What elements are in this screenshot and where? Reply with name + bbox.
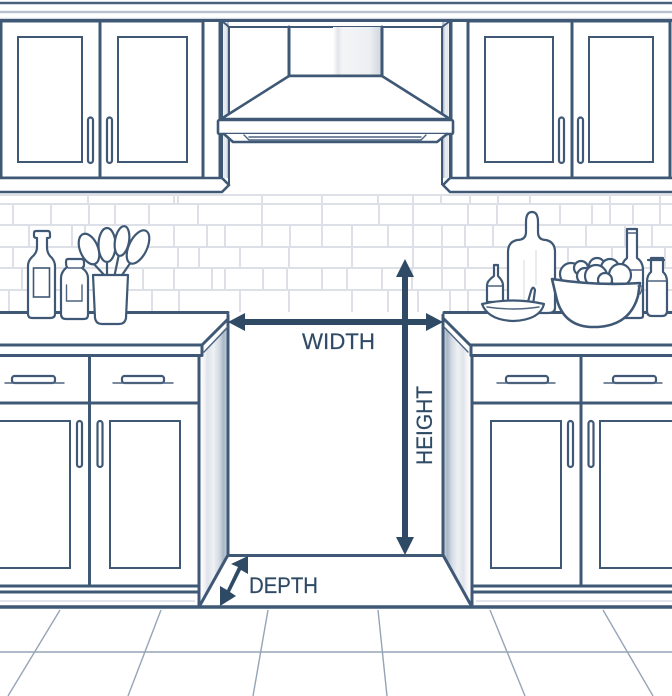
width label: WIDTH bbox=[302, 329, 375, 354]
cabinet side stile bbox=[203, 21, 220, 178]
door: upper right 2 bbox=[572, 21, 670, 178]
right toe kick bbox=[472, 586, 672, 601]
accessories: jar bbox=[61, 259, 88, 319]
range hood bbox=[218, 21, 453, 185]
width arrow bbox=[228, 313, 443, 331]
accessories: cutting board bbox=[508, 212, 555, 313]
crown moulding bbox=[0, 3, 672, 20]
depth label: DEPTH bbox=[249, 573, 318, 598]
drawer: lower left 1 bbox=[0, 356, 199, 586]
door: upper right 1 bbox=[468, 21, 572, 178]
cup bbox=[93, 275, 128, 324]
bowl bbox=[552, 279, 640, 327]
drawer: lower left 2 bbox=[113, 376, 173, 383]
accessories: wine bottle bbox=[622, 229, 643, 318]
spoon 1 bbox=[75, 231, 107, 278]
drawer: lower right 2 bbox=[604, 376, 662, 383]
accessories: fruit bowl bbox=[552, 258, 642, 327]
accessories: right small bottle bbox=[647, 258, 667, 316]
lower left cabinets bbox=[0, 356, 199, 601]
upper cabinets: right bbox=[443, 21, 672, 192]
accessories: utensil cup bbox=[75, 225, 154, 324]
fruit bbox=[560, 258, 631, 287]
hood chimney bbox=[289, 27, 382, 76]
spoon 4 bbox=[120, 227, 154, 278]
hood opening frame bbox=[222, 21, 450, 185]
door: lower left 2 bbox=[98, 421, 180, 568]
accessories: small bowl bbox=[482, 288, 544, 321]
door: lower left 1 bbox=[0, 421, 82, 568]
spoon 3 bbox=[113, 225, 131, 278]
trim rail bbox=[0, 178, 229, 192]
hood underside bbox=[224, 134, 447, 142]
door: upper left 1 bbox=[1, 21, 100, 178]
right lower counter bbox=[444, 312, 672, 356]
depth arrow bbox=[220, 556, 248, 606]
spoon 2 bbox=[98, 228, 116, 278]
height label: HEIGHT bbox=[412, 386, 437, 465]
toe kick bbox=[0, 586, 199, 601]
right cabinet side stile bbox=[451, 21, 468, 178]
height arrow bbox=[396, 259, 414, 555]
accessories: left bottle bbox=[28, 231, 55, 318]
opening floor bbox=[0, 556, 672, 607]
hood canopy bbox=[221, 76, 450, 119]
lower right cabinets bbox=[472, 356, 672, 601]
left lower counter bbox=[0, 312, 228, 356]
tile backsplash bbox=[0, 195, 672, 312]
door: lower right 1 bbox=[491, 421, 573, 568]
door: upper left 2 bbox=[100, 21, 203, 178]
right trim rail bbox=[443, 178, 672, 192]
right side panel bbox=[443, 315, 472, 607]
hood band bbox=[218, 120, 453, 134]
door: lower right 2 bbox=[588, 421, 672, 568]
accessories: small bottle right bbox=[487, 265, 503, 302]
drawer: lower right 1 bbox=[472, 356, 672, 586]
floor tiles bbox=[0, 610, 672, 696]
upper cabinets: left bbox=[0, 21, 229, 192]
left side panel bbox=[199, 315, 228, 607]
